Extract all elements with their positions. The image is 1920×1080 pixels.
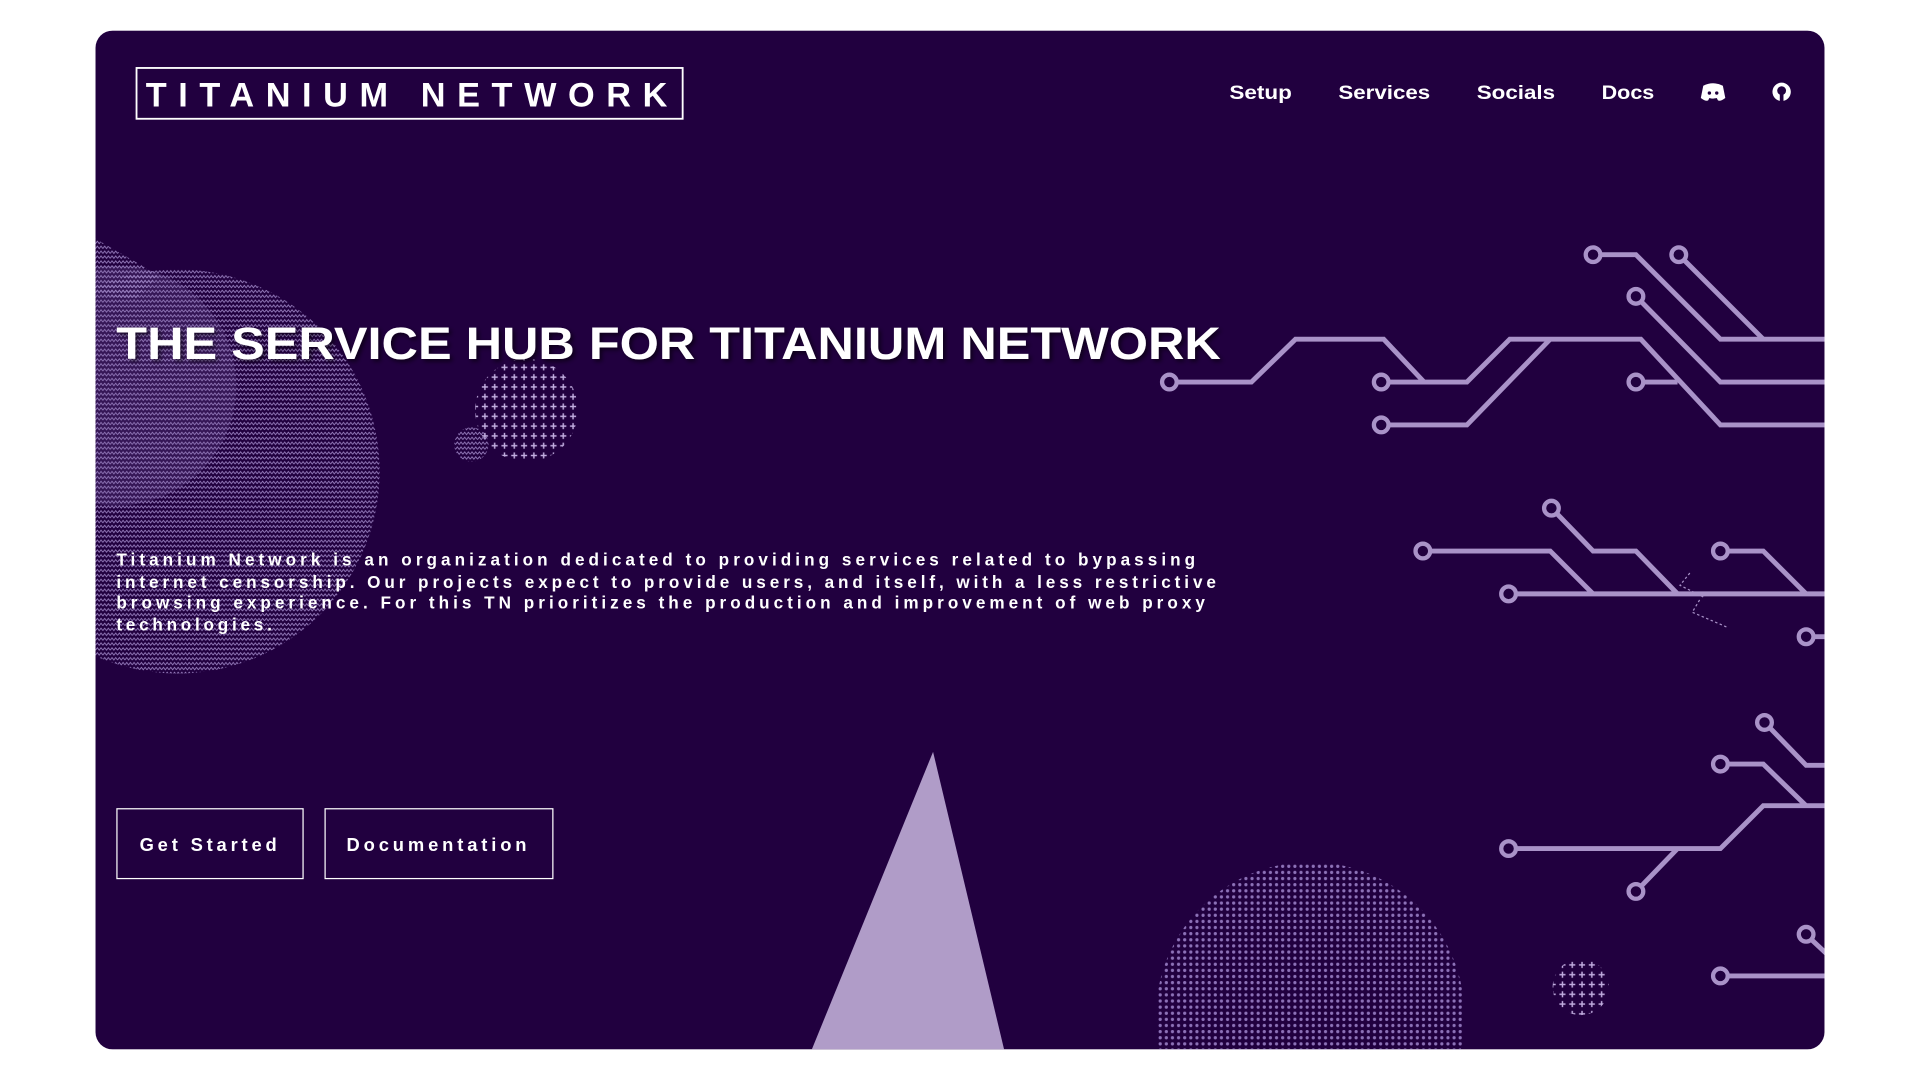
- description: browsing experience. For this TN prioritizes the production and improvement of web proxy: [116, 593, 1205, 613]
- button: documentation: Documentation: [347, 834, 527, 855]
- icon: github: [1772, 83, 1791, 102]
- decoration: plus circle: [454, 359, 578, 462]
- button: get started: Get Started: [140, 834, 277, 855]
- decoration: dotted circle: [1158, 864, 1462, 1050]
- description: [116, 550, 1216, 635]
- logo: TITANIUM NETWORK: [146, 77, 668, 115]
- decoration: triangle: [812, 752, 1004, 1049]
- decoration: circuit lines: [1177, 255, 1831, 976]
- nav: Services: [1338, 83, 1430, 104]
- nav: [1229, 83, 1654, 104]
- icon: discord: [1701, 83, 1725, 101]
- description: technologies.: [116, 615, 272, 635]
- nav: Setup: [1229, 83, 1292, 104]
- decoration: zigzag circles: [96, 238, 380, 674]
- title: THE SERVICE HUB FOR TITANIUM NETWORK: [116, 318, 1221, 369]
- nav: Socials: [1477, 83, 1555, 104]
- decoration: dashed chevrons: [1680, 573, 1727, 627]
- button: documentation: [325, 809, 553, 879]
- description: internet censorship. Our projects expect to provide users, and itself, with a less restrictive: [116, 572, 1216, 592]
- description: Titanium Network is an organization dedicated to providing services related to bypassing: [116, 550, 1195, 570]
- decoration: small plus circle: [1553, 959, 1609, 1015]
- nav: Docs: [1602, 83, 1654, 104]
- button: get started: [117, 809, 303, 879]
